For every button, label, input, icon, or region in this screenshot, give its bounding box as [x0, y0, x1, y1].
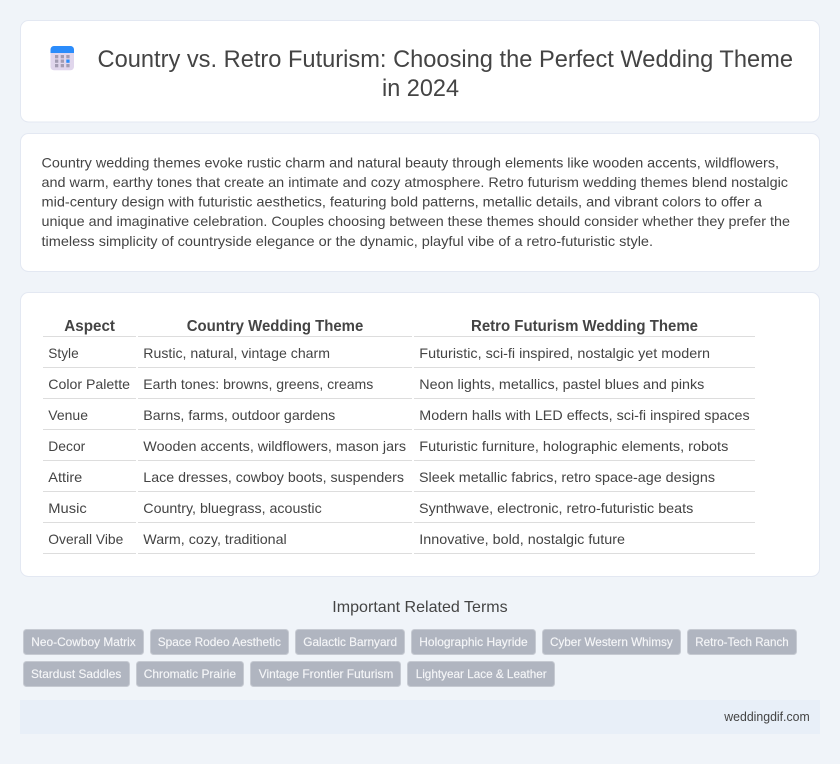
tag: Neo-Cowboy Matrix [24, 630, 144, 654]
tag: Cyber Western Whimsy: Cyber Western Whimsy [550, 635, 673, 649]
tag: Space Rodeo Aesthetic [150, 630, 288, 654]
table row: attire: Lace dresses, cowboy boots, suspenders [143, 469, 404, 485]
table row: venue [48, 407, 750, 423]
tag: Lightyear Lace & Leather: Lightyear Lace & Leather [416, 667, 547, 681]
table row: overall vibe [48, 531, 625, 547]
table header: Retro Futurism Wedding Theme [471, 318, 698, 335]
tag: Galactic Barnyard [296, 630, 404, 654]
table row: style: Futuristic, sci-fi inspired, nostalgic yet modern [419, 345, 710, 361]
tag: Chromatic Prairie [136, 662, 244, 686]
table row: venue: Modern halls with LED effects, sci-fi inspired spaces [419, 407, 750, 423]
title: in 2024 [382, 75, 459, 102]
table row: venue: Venue [48, 407, 88, 423]
table row: attire: Sleek metallic fabrics, retro space-age designs [419, 469, 715, 485]
title [98, 46, 793, 102]
table row: decor: Futuristic furniture, holographic elements, robots [419, 438, 728, 454]
table row: decor: Wooden accents, wildflowers, mason jars [143, 438, 406, 454]
text block: introduction paragraph: and warm, earthy tones that create an intimate and cozy atmosphere. Retro futurism wedding themes blend nostalgic [42, 174, 788, 190]
table row: music: Country, bluegrass, acoustic [143, 500, 322, 516]
tag: Chromatic Prairie: Chromatic Prairie [144, 667, 236, 681]
tag cloud [24, 630, 796, 686]
tag: Vintage Frontier Futurism [250, 662, 400, 686]
tag: Neo-Cowboy Matrix: Neo-Cowboy Matrix [31, 635, 136, 649]
panel: header [20, 20, 820, 122]
table row: overall vibe: Overall Vibe [48, 531, 123, 547]
tag: Cyber Western Whimsy [542, 630, 680, 654]
footer source text: weddingdif.com [723, 710, 810, 724]
tag: Vintage Frontier Futurism: Vintage Frontier Futurism [259, 667, 393, 681]
panel: introduction [20, 134, 820, 272]
table row: attire [48, 469, 715, 485]
table row: music [48, 500, 693, 516]
footer bar [20, 700, 820, 734]
tag: Holographic Hayride: Holographic Hayride [419, 635, 528, 649]
text block: introduction paragraph: unique and imaginative celebration. Couples choosing between these themes should consider whether they prefer the [42, 213, 790, 229]
table row: color palette [48, 376, 704, 392]
table row: style: Style [48, 345, 79, 361]
icon: calendar [50, 46, 74, 70]
text block: introduction paragraph: Country wedding themes evoke rustic charm and natural beauty through elements like wooden accents, wildflowers, [42, 154, 779, 170]
tag: Stardust Saddles [24, 662, 130, 686]
text block: introduction paragraph [42, 154, 790, 249]
tag: Galactic Barnyard: Galactic Barnyard [303, 635, 397, 649]
text block: introduction paragraph: mid-century design with futuristic aesthetics, featuring bold patterns, metallic details, and vibrant colors to offer a [42, 194, 762, 210]
tag: Retro-Tech Ranch [688, 630, 796, 654]
table row: color palette: Color Palette [48, 376, 130, 392]
panel: comparison table [20, 292, 820, 576]
tag: Lightyear Lace & Leather [408, 662, 554, 686]
tag: Stardust Saddles: Stardust Saddles [31, 667, 121, 681]
tag: Holographic Hayride [412, 630, 536, 654]
table row: attire: Attire [48, 469, 83, 485]
table row: style: Rustic, natural, vintage charm [143, 345, 330, 361]
table row: decor: Decor [48, 438, 86, 454]
text block: introduction paragraph: timeless simplicity of countryside elegance or the dynamic, playful vibe of a retro-futuristic style. [42, 233, 653, 249]
tag: Retro-Tech Ranch: Retro-Tech Ranch [695, 635, 789, 649]
table header: Country Wedding Theme [187, 318, 363, 335]
tag: Space Rodeo Aesthetic: Space Rodeo Aesthetic [158, 635, 281, 649]
table row: overall vibe: Warm, cozy, traditional [143, 531, 287, 547]
table row: overall vibe: Innovative, bold, nostalgic future [419, 531, 625, 547]
table row: style [48, 345, 710, 361]
table row: color palette: Earth tones: browns, greens, creams [143, 376, 373, 392]
table row: venue: Barns, farms, outdoor gardens [143, 407, 335, 423]
table row: music: Synthwave, electronic, retro-futuristic beats [419, 500, 693, 516]
title: Country vs. Retro Futurism: Choosing the Perfect Wedding Theme [98, 46, 793, 73]
table header: Aspect [64, 318, 116, 335]
heading: important related terms: Important Related Terms [332, 599, 508, 616]
table header [64, 318, 698, 335]
table row: music: Music [48, 500, 87, 516]
table row: decor [48, 438, 728, 454]
table row: color palette: Neon lights, metallics, pastel blues and pinks [419, 376, 704, 392]
